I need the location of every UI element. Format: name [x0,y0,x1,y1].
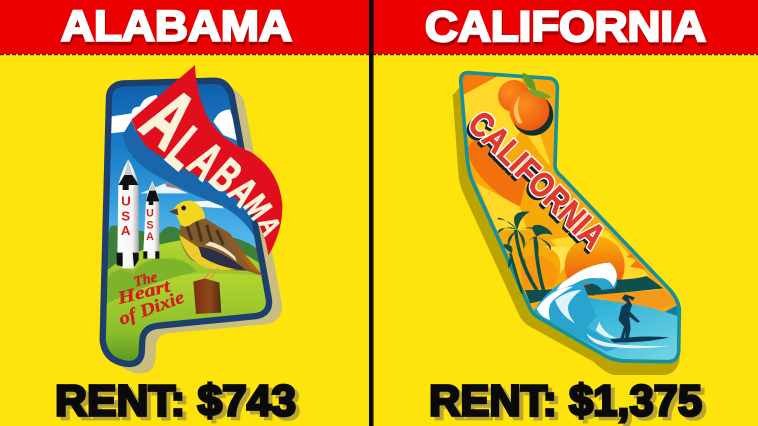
state scene [462,74,678,360]
banner lettering: B [200,149,251,203]
surfer [618,294,640,340]
rocket small [143,181,159,259]
dark headland [525,276,663,303]
oranges [498,73,553,136]
wooden post [193,278,221,314]
alabama rent label: RENT: $743 [55,376,296,426]
slogan: the heart of dixie: of Dixie [116,287,187,329]
slogan: the heart of dixie [114,269,187,329]
rocket small: A [146,231,154,243]
bird [169,201,263,278]
state outline [461,73,679,362]
clouds [110,95,240,208]
heading: Alabama: ALABAMA [62,6,293,54]
california lettering: CALIFORNIA [460,104,612,256]
heading: California: CALIFORNIA [425,3,706,51]
sky stripes [462,74,496,94]
state shadow [453,87,681,375]
california lettering: CALIFORNIA [460,104,612,256]
banner lettering: L [154,114,216,182]
hills [108,240,262,276]
rocket small: S [146,219,154,231]
state outline [103,81,269,364]
sun [565,236,625,296]
center divider [369,0,374,426]
state shadow [111,86,282,373]
banner lettering: A [252,212,286,240]
rocket large: U [121,194,131,209]
heading: Alabama: ALABAMA [61,2,292,50]
sea [533,297,680,363]
rocket large [117,159,139,268]
foreground hill [100,259,197,303]
palm trees [497,212,553,293]
blue ribbon shadow [122,120,254,236]
rocket large: S [121,208,130,223]
banner lettering: A [126,73,211,166]
california rent label: RENT: $1,375 [429,376,702,426]
california state illustration [453,67,687,375]
banner lettering: A [220,169,266,215]
banner lettering [126,73,286,240]
rocket large: A [121,223,131,238]
surfboard [610,337,669,343]
header band [0,0,758,54]
banner lettering: M [236,188,279,227]
wave [533,263,670,352]
rocket small: U [146,207,154,219]
alabama state illustration [97,65,286,373]
heading: California: CALIFORNIA [426,6,707,54]
red banner [132,65,282,256]
banner lettering: A [178,131,234,191]
state scene [106,84,266,361]
slogan: the heart of dixie: The [132,269,159,291]
california lettering: CALIFORNIA [458,107,610,259]
distant trees [108,226,259,270]
slogan: the heart of dixie: Heart [114,275,173,308]
